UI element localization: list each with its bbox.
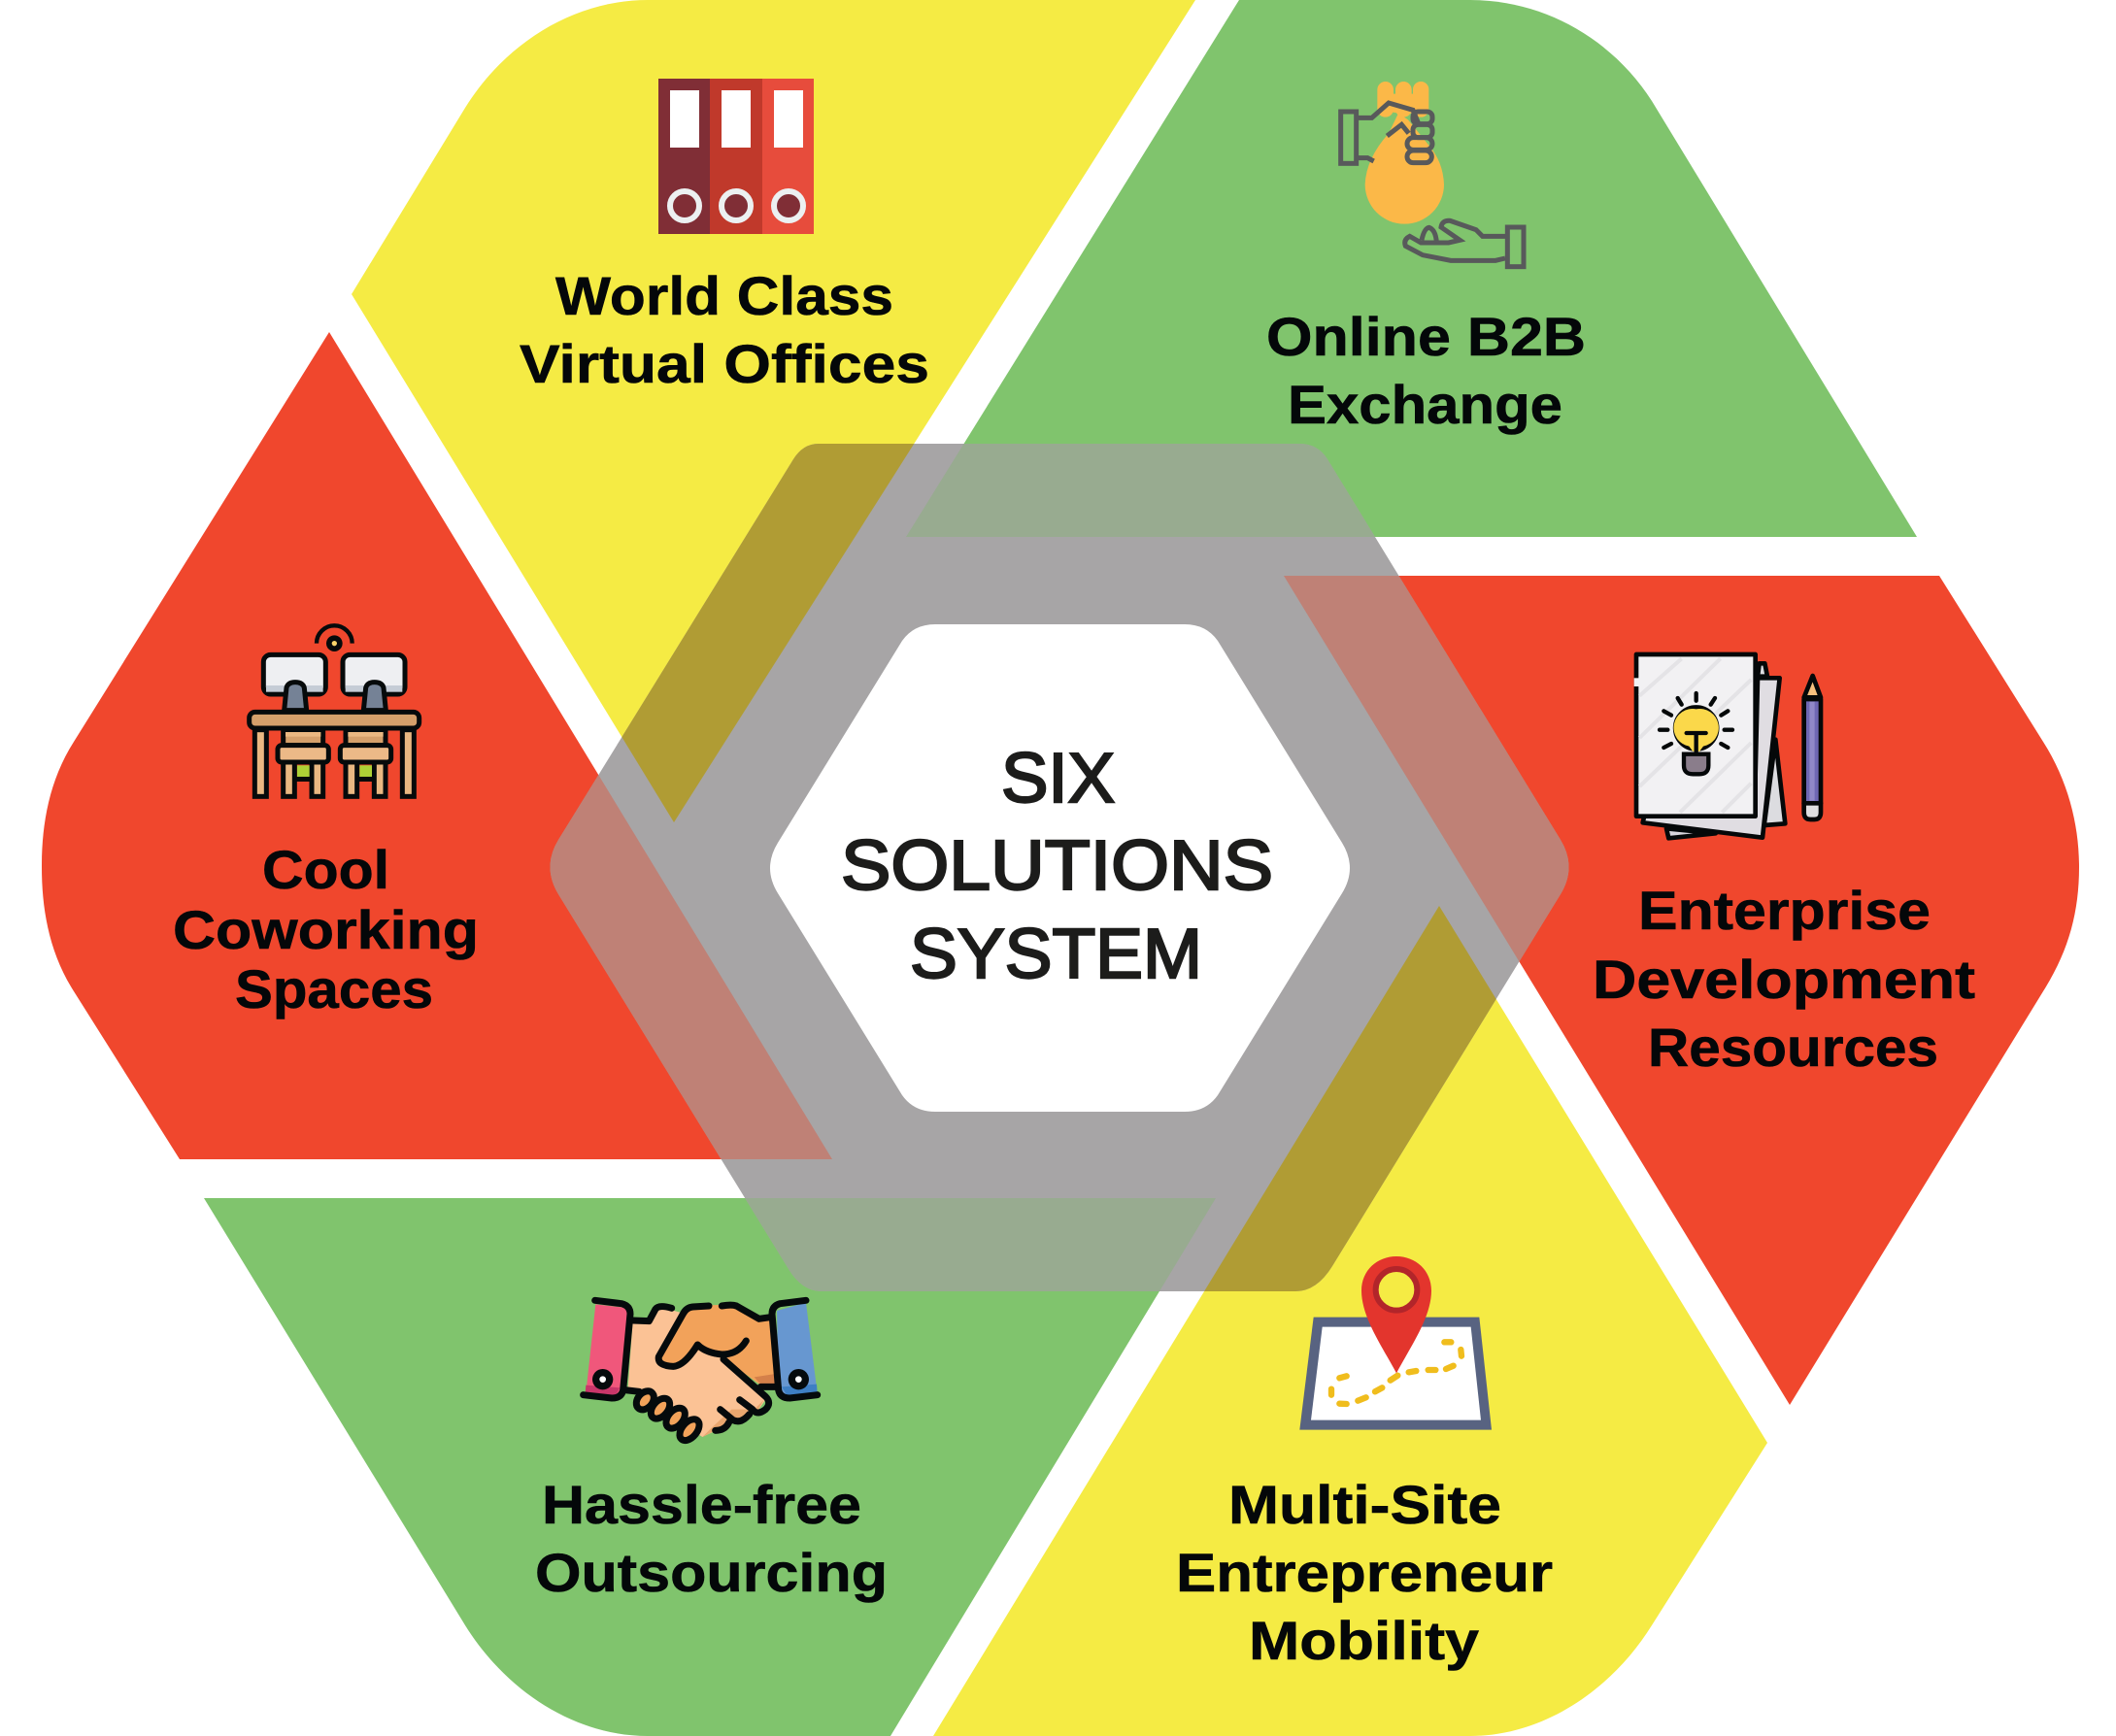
panel shape: red right: [1284, 576, 2079, 1405]
label: Cool Coworking Spaces: Spaces: [235, 958, 433, 1019]
label: Online B2B Exchange: Online B2B: [1266, 306, 1586, 367]
label: Multi-Site Entrepreneur Mobility: Multi-Site: [1228, 1474, 1501, 1535]
panel shape: green bottom: [204, 1198, 1216, 1736]
label: Cool Coworking Spaces: Cool: [262, 839, 389, 900]
label: Multi-Site Entrepreneur Mobility: Entrepreneur: [1176, 1542, 1553, 1603]
panel: Cool Coworking Spaces: [42, 332, 832, 1159]
panel shape: red left: [42, 332, 832, 1159]
label: World Class Virtual Offices: [520, 265, 929, 394]
icon: handshake: [584, 1300, 818, 1444]
title: Six Solutions System: SIX: [1001, 740, 1115, 818]
label: Multi-Site Entrepreneur Mobility: Mobility: [1249, 1610, 1479, 1671]
panel: Hassle-free Outsourcing: [204, 1198, 1216, 1736]
label: World Class Virtual Offices: World Class: [555, 265, 893, 326]
label: World Class Virtual Offices: Virtual Offices: [520, 333, 929, 394]
icon: hands exchanging money bag: [1341, 82, 1524, 267]
title: Six Solutions System: [841, 740, 1273, 993]
label: Enterprise Development Resources: Enterprise: [1638, 880, 1931, 941]
ring: grey base: [524, 427, 1593, 1311]
panel: Enterprise Development Resources: [1284, 576, 2079, 1405]
panel: Multi-Site Entrepreneur Mobility: [933, 906, 1767, 1736]
panel: Online B2B Exchange: [906, 0, 1917, 537]
panel shape: yellow top: [352, 0, 1195, 822]
label: Hassle-free Outsourcing: [535, 1474, 888, 1603]
icon: coworking desks: [250, 625, 420, 796]
label: Hassle-free Outsourcing: Outsourcing: [535, 1542, 888, 1603]
panel shape: green top: [906, 0, 1917, 537]
central hexagon ring: [550, 444, 1569, 1291]
label: Enterprise Development Resources: Resources: [1648, 1017, 1938, 1078]
label: Hassle-free Outsourcing: Hassle-free: [542, 1474, 861, 1535]
icon: papers, light bulb and pencil: [1634, 654, 1821, 838]
label: Enterprise Development Resources: [1593, 880, 1975, 1078]
label: Multi-Site Entrepreneur Mobility: [1176, 1474, 1553, 1671]
icon: map with pin: [1299, 1256, 1492, 1430]
title: Six Solutions System: SYSTEM: [910, 916, 1202, 993]
label: Cool Coworking Spaces: [173, 839, 479, 1019]
label: Online B2B Exchange: [1266, 306, 1586, 435]
icon: binders: [658, 79, 814, 234]
label: Cool Coworking Spaces: Coworking: [173, 899, 479, 960]
ring overlaps with panels: [550, 444, 1569, 1291]
label: Online B2B Exchange: Exchange: [1288, 374, 1562, 435]
title: Six Solutions System: SOLUTIONS: [841, 827, 1273, 905]
panel shape: yellow bottom: [933, 906, 1767, 1736]
panel: World Class Virtual Offices: [352, 0, 1195, 822]
label: Enterprise Development Resources: Development: [1593, 949, 1975, 1010]
